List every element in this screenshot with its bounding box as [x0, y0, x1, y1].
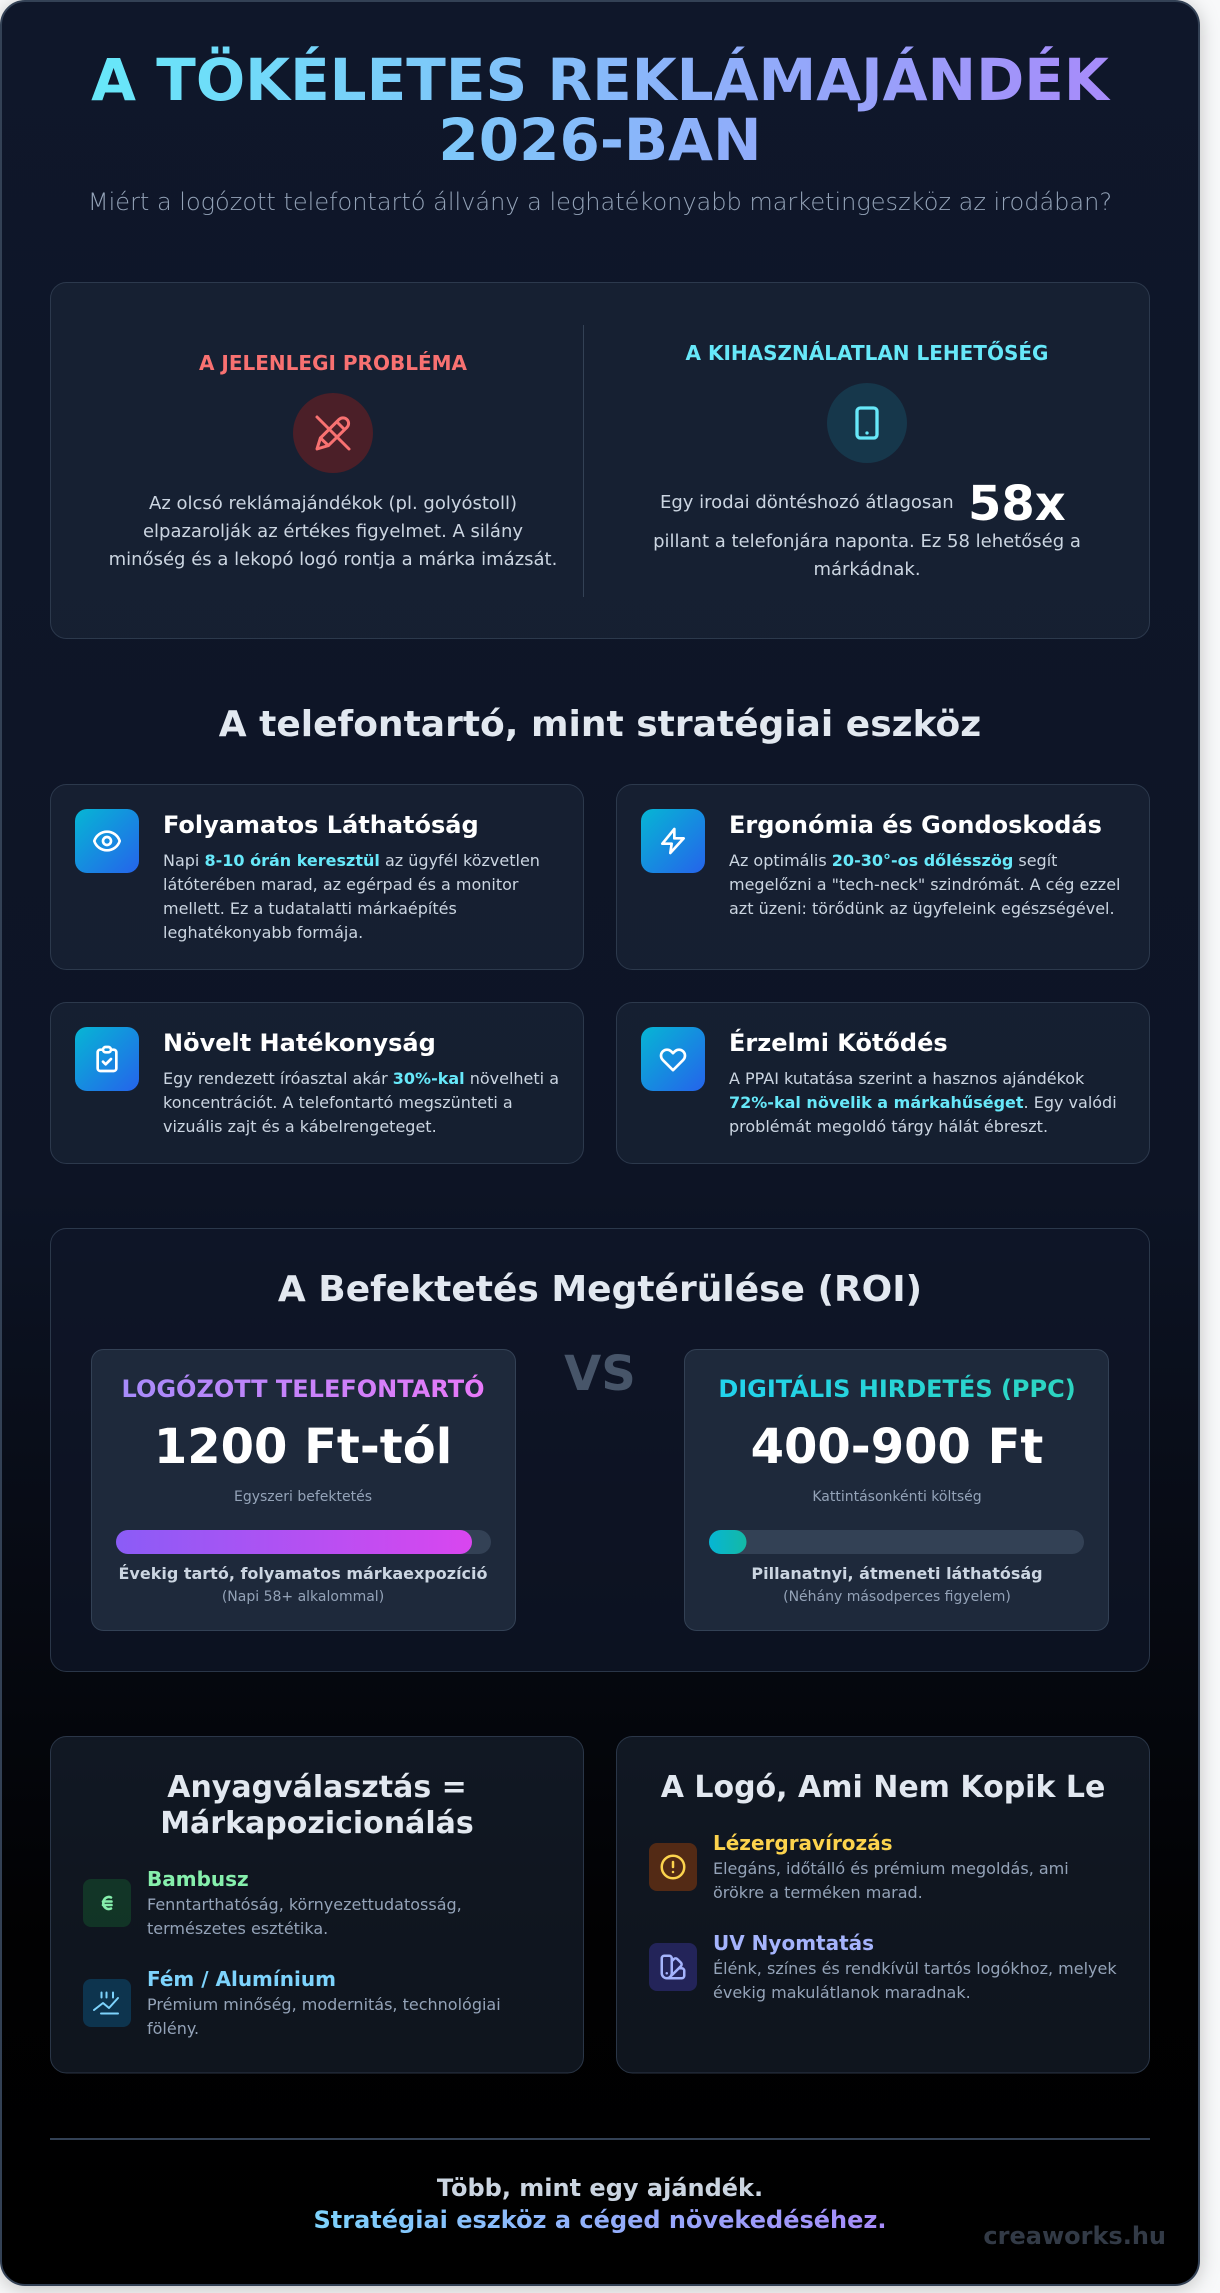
materials heading: Anyagválasztás = — [167, 1770, 467, 1805]
ROI heading: A Befektetés Megtérülése (ROI) — [278, 1269, 922, 1310]
card: PPC — [684, 1350, 1108, 1630]
item: metal: fölény. — [147, 2019, 199, 2038]
materials heading — [160, 1770, 474, 1841]
card: PPC: DIGITÁLIS HIRDETÉS (PPC) — [718, 1374, 1076, 1403]
item: UV printing: Élénk, színes és rendkívül tartós logókhoz, melyek — [713, 1959, 1117, 1978]
problem text: Az olcsó reklámajándékok (pl. golyóstoll) — [149, 493, 517, 514]
item: bamboo: Fenntarthatóság, környezettudatosság, — [147, 1895, 462, 1914]
item: bamboo: Bambusz — [147, 1867, 249, 1891]
card: phone holder: Egyszeri befektetés — [234, 1489, 372, 1505]
item: laser engraving: Lézergravírozás — [713, 1831, 893, 1855]
panel: visibility: mellett. Ez a tudatalatti márkaépítés — [163, 899, 457, 918]
subtitle: Miért a logózott telefontartó állvány a leghatékonyabb marketingeszköz az irodában? — [88, 188, 1112, 216]
footer message — [314, 2174, 886, 2234]
panel: ergonomics: Ergonómia és Gondoskodás — [729, 811, 1102, 839]
problem text: minőség és a lekopó logó rontja a márka imázsát. — [109, 549, 557, 570]
icon: mobile phone — [827, 383, 907, 463]
panel: problem and opportunity — [50, 282, 1150, 638]
panel: efficiency — [50, 1002, 584, 1164]
title: 2026-BAN — [438, 106, 762, 174]
panel: ergonomics — [616, 784, 1150, 970]
section heading: A telefontartó, mint stratégiai eszköz — [219, 704, 981, 745]
item: metal — [83, 1967, 501, 2038]
item: metal: Prémium minőség, modernitás, technológiai — [147, 1995, 501, 2014]
footer message: Több, mint egy ajándék. — [437, 2174, 763, 2202]
panel: visibility: Folyamatos Láthatóság — [163, 811, 479, 839]
panel: visibility: Napi 8-10 órán keresztül az ügyfél közvetlen — [163, 851, 540, 870]
panel: emotional bond: A PPAI kutatása szerint a hasznos ajándékok — [729, 1069, 1085, 1088]
problem text: elpazarolják az értékes figyelmet. A silány — [143, 521, 523, 542]
icon: heart — [641, 1027, 705, 1091]
panel: logo techniques — [616, 1736, 1150, 2073]
panel: ergonomics: azt üzeni: törődünk az ügyfeleink egészségével. — [729, 899, 1115, 918]
card: PPC: (Néhány másodperces figyelem) — [783, 1589, 1011, 1605]
icon: lightning — [641, 809, 705, 873]
opportunity text: pillant a telefonjára naponta. Ez 58 lehetőség a — [653, 531, 1081, 552]
panel: visibility: látóterében marad, az egérpad és a monitor — [163, 875, 519, 894]
item: laser engraving — [649, 1831, 1069, 1902]
icon: clipboard check — [75, 1027, 139, 1091]
problem heading: A JELENLEGI PROBLÉMA — [199, 351, 468, 375]
footer message: Stratégiai eszköz a céged növekedéséhez. — [314, 2206, 886, 2234]
panel: efficiency: koncentrációt. A telefontartó megszünteti a — [163, 1093, 513, 1112]
item: laser engraving: örökre a terméken marad. — [713, 1883, 923, 1902]
panel: emotional bond: Érzelmi Kötődés — [729, 1028, 948, 1057]
panel: visibility — [50, 784, 584, 970]
item: bamboo: természetes esztétika. — [147, 1919, 328, 1938]
icon: eye — [75, 809, 139, 873]
progress bar — [709, 1530, 1084, 1554]
brand watermark: creaworks.hu — [983, 2222, 1166, 2250]
card: phone holder: LOGÓZOTT TELEFONTARTÓ — [122, 1373, 484, 1403]
panel: efficiency: Egy rendezett íróasztal akár 30%-kal növelheti a — [163, 1069, 559, 1088]
opportunity text: 58x — [968, 476, 1066, 532]
item: UV printing: UV Nyomtatás — [713, 1931, 874, 1955]
item: laser engraving: Elegáns, időtálló és prémium megoldás, ami — [713, 1859, 1069, 1878]
panel: efficiency: Növelt Hatékonyság — [163, 1029, 436, 1057]
title: A TÖKÉLETES REKLÁMAJÁNDÉK — [91, 45, 1111, 114]
card: phone holder: 1200 Ft-tól — [154, 1419, 452, 1475]
materials heading: Márkapozicionálás — [160, 1806, 474, 1841]
card: phone holder — [92, 1350, 516, 1630]
opportunity column — [653, 341, 1081, 580]
opportunity text — [653, 476, 1081, 580]
opportunity text: márkádnak. — [813, 559, 921, 580]
item: UV printing: évekig makulátlanok maradnak. — [713, 1983, 971, 2002]
panel: ergonomics: megelőzni a "tech-neck" szindrómát. A cég ezzel — [729, 875, 1120, 894]
problem column — [109, 351, 557, 570]
problem text — [109, 493, 557, 570]
card: PPC: 400-900 Ft — [751, 1419, 1043, 1475]
panel: materials — [50, 1736, 584, 2073]
card: PPC: Pillanatnyi, átmeneti láthatóság — [751, 1564, 1043, 1583]
item: bamboo — [83, 1867, 462, 1938]
panel: visibility: leghatékonyabb formája. — [163, 923, 363, 942]
item: metal: Fém / Alumínium — [147, 1967, 336, 1991]
title — [91, 45, 1111, 174]
panel: emotional bond: problémát megoldó tárgy hálát ébreszt. — [729, 1117, 1048, 1136]
panel: ROI comparison — [50, 1228, 1150, 1672]
VS label: VS — [564, 1346, 636, 1402]
panel: emotional bond — [616, 1002, 1150, 1164]
panel: ergonomics: Az optimális 20-30°-os dőlésszög segít — [729, 851, 1057, 870]
opportunity text: Egy irodai döntéshozó átlagosan — [660, 492, 954, 513]
opportunity heading: A KIHASZNÁLATLAN LEHETŐSÉG — [686, 341, 1048, 365]
panel: emotional bond: 72%-kal növelik a márkahűséget. Egy valódi — [729, 1093, 1117, 1112]
card: phone holder: (Napi 58+ alkalommal) — [222, 1589, 384, 1605]
progress bar — [116, 1530, 491, 1554]
panel: efficiency: vizuális zajt és a kábelrengeteget. — [163, 1117, 437, 1136]
card: phone holder: Évekig tartó, folyamatos márkaexpozíció — [118, 1564, 488, 1583]
logo heading: A Logó, Ami Nem Kopik Le — [661, 1770, 1105, 1805]
item: UV printing — [649, 1931, 1117, 2002]
card: PPC: Kattintásonkénti költség — [812, 1489, 982, 1505]
icon: crossed pencil — [293, 393, 373, 473]
